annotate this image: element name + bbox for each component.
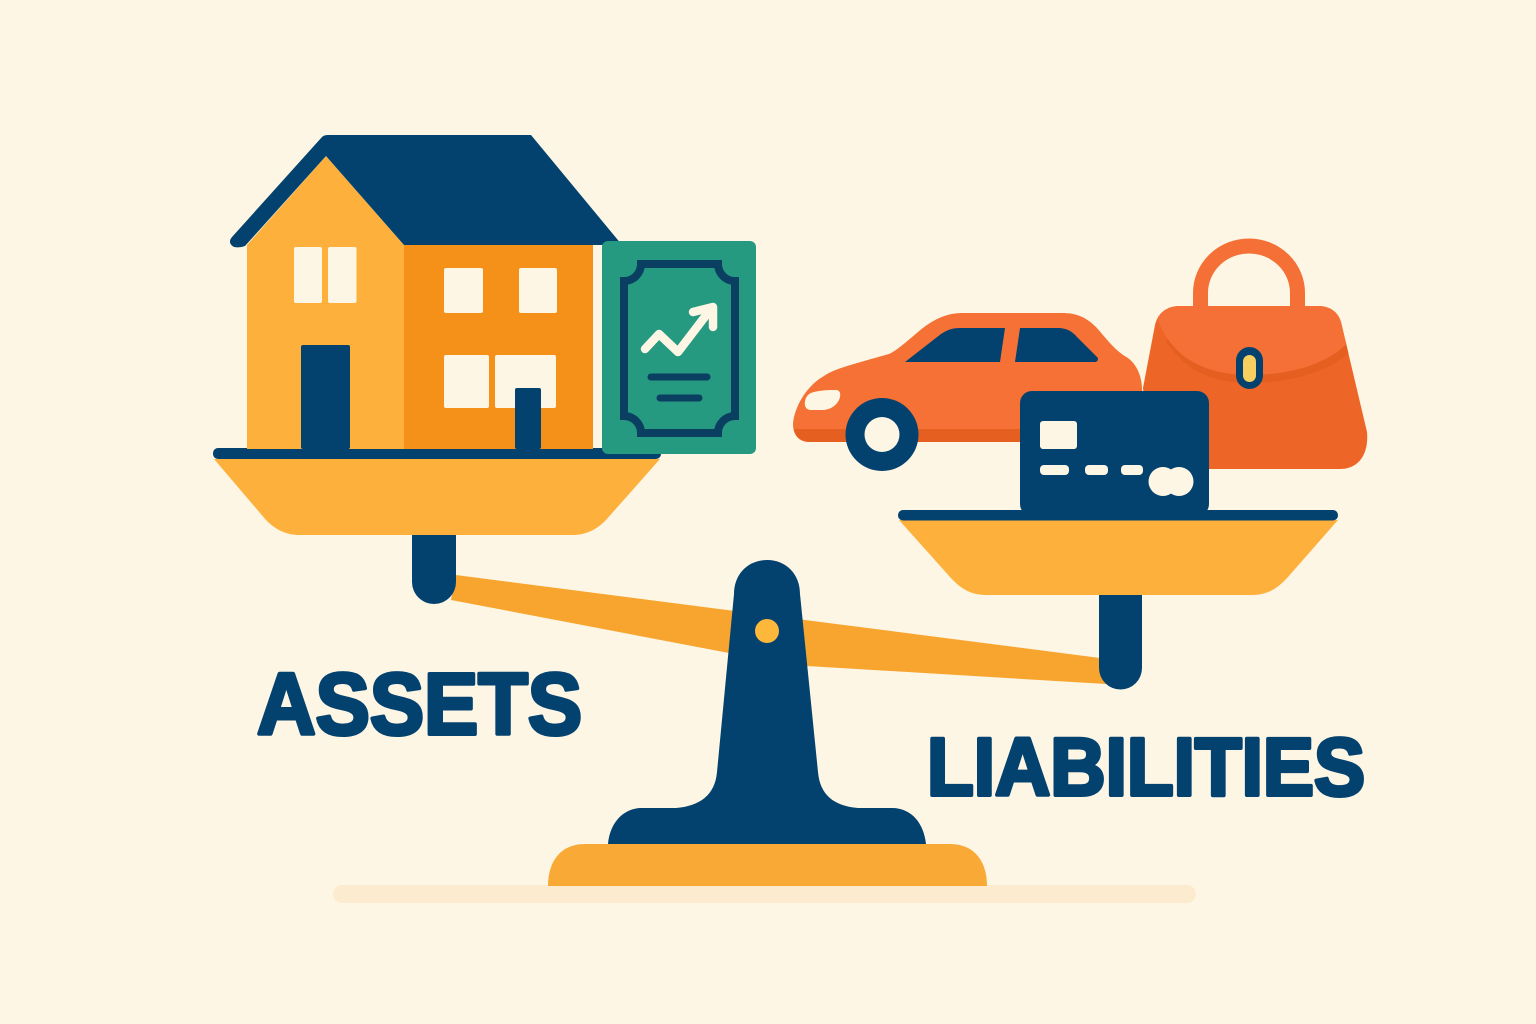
right pan bowl	[899, 520, 1338, 595]
growth arrow	[645, 307, 713, 352]
stand column	[608, 560, 926, 844]
car side windows	[905, 328, 1098, 362]
front wheel	[846, 398, 918, 471]
right wing windows	[444, 268, 557, 408]
house left wing	[247, 156, 404, 449]
car body	[793, 313, 1142, 442]
card number dashes	[1040, 465, 1143, 475]
certificate text lines	[651, 377, 707, 398]
bag body	[1143, 306, 1367, 469]
label: liabilities: LIABILITIES	[927, 722, 1365, 813]
scale stand	[548, 560, 987, 886]
front door	[301, 345, 350, 449]
bag clasp	[1236, 347, 1263, 389]
bag flap shadow	[1165, 340, 1352, 383]
card logo circles	[1148, 467, 1194, 496]
right pan post	[1099, 590, 1142, 690]
left pan post	[412, 530, 456, 604]
stand base	[548, 844, 987, 886]
card chip	[1040, 421, 1077, 449]
scale beam	[451, 575, 1106, 684]
icon: stock certificate	[602, 241, 756, 454]
left wing windows	[294, 247, 356, 303]
certificate frame	[624, 264, 735, 433]
icon: credit card	[1020, 391, 1209, 516]
icon: house	[230, 135, 622, 449]
certificate card	[602, 241, 756, 454]
card body	[1020, 391, 1209, 516]
label: assets: ASSETS	[257, 656, 582, 753]
left pan bowl	[214, 459, 660, 535]
pivot pin	[755, 619, 779, 643]
right pan platform	[898, 510, 1338, 520]
icon: car	[793, 313, 1142, 471]
car lower trim	[794, 429, 1142, 442]
bag flap	[1158, 306, 1346, 374]
bag handle	[1200, 246, 1298, 310]
right pan: liabilities	[793, 246, 1367, 689]
side door	[515, 388, 541, 449]
icon: handbag	[1143, 246, 1367, 469]
house right wing	[404, 245, 593, 449]
left pan platform	[213, 448, 661, 459]
ground shadow	[333, 885, 1196, 903]
roof	[230, 135, 622, 247]
headlight	[805, 390, 840, 410]
left pan: assets	[213, 448, 661, 604]
